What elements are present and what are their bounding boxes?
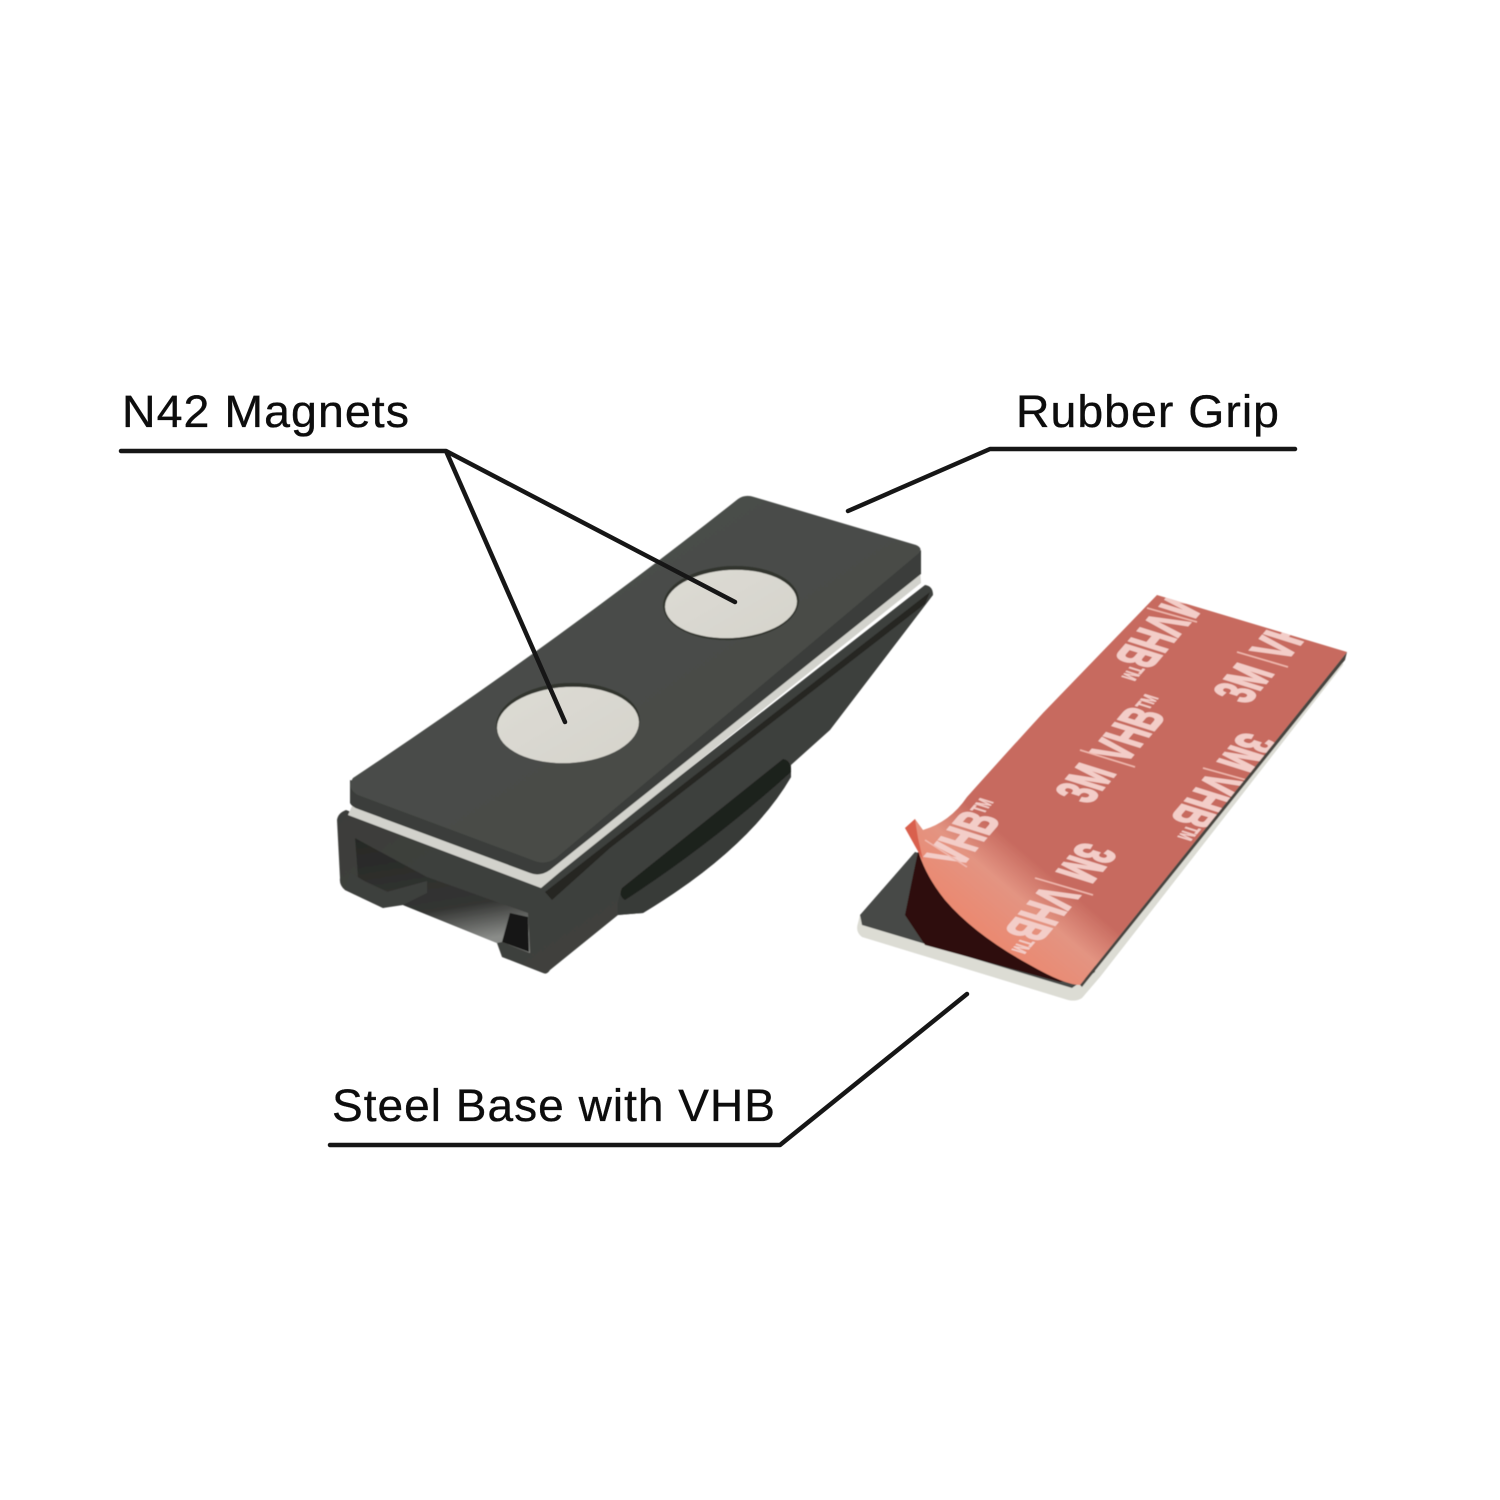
print: 3M centre: 3M — [1044, 758, 1129, 808]
rubber plate top — [350, 496, 920, 863]
steel plate dark face — [860, 852, 1100, 988]
clip right lip — [502, 913, 529, 952]
print: VHB flipped top: VHB — [1102, 607, 1201, 674]
print: VHB flipped lower: TM — [1006, 936, 1038, 955]
leader line: steel base — [330, 994, 967, 1145]
callout: Rubber Grip — [848, 386, 1295, 511]
steel layer strip — [348, 570, 921, 888]
print: VHB centre: VHB — [1079, 701, 1178, 768]
heading: Steel Base with VHB: Steel Base with VHB — [332, 1080, 776, 1131]
callout: N42 Magnets — [121, 386, 735, 722]
product: steel base with VHB tape — [857, 573, 1347, 1001]
heading: N42 Magnets: N42 Magnets — [122, 386, 410, 437]
print: 3M upper right: 3M — [1202, 658, 1287, 708]
clip front slot — [355, 838, 530, 953]
leader lines: magnets — [121, 451, 735, 722]
print: VHB near peel: VHB — [914, 805, 1013, 872]
print: VHB flipped right: VHB — [1158, 767, 1257, 834]
magnet front — [494, 679, 642, 767]
print: VHB near peel: TM — [967, 797, 999, 816]
print: 3M flipped right: 3M — [1204, 728, 1289, 778]
product: rubber magnetic clip — [337, 496, 933, 974]
callout: Steel Base with VHB — [330, 994, 967, 1145]
print: VHB centre: TM — [1132, 693, 1164, 712]
print: VHB flipped top cut: 3M — [1146, 573, 1231, 623]
side ridge grip — [618, 760, 791, 915]
print: VHB flipped lower: VHB — [992, 880, 1091, 947]
leader line: rubber grip — [848, 449, 1295, 511]
dark groove along base — [545, 592, 930, 900]
print: VHB upper right: VHB — [1239, 599, 1339, 666]
ridge highlight — [621, 759, 791, 900]
peel tip — [905, 819, 923, 860]
magnet rear — [661, 562, 801, 644]
red tape liner — [905, 595, 1347, 985]
print separators — [925, 608, 1288, 895]
print: VHB flipped top: TM — [1116, 663, 1148, 682]
rubber plate side — [350, 550, 921, 874]
print: 3M flipped lower: 3M — [1043, 838, 1128, 888]
heading: Rubber Grip: Rubber Grip — [1016, 386, 1280, 437]
tape printed marks — [914, 573, 1339, 959]
clip left lip — [345, 872, 427, 908]
steel right edge shadow — [1080, 652, 1347, 987]
steel plate edge — [857, 655, 1343, 1001]
shadow under peeled tape — [905, 852, 1085, 982]
clip base body — [337, 585, 933, 974]
print: VHB flipped right: TM — [1172, 823, 1204, 842]
